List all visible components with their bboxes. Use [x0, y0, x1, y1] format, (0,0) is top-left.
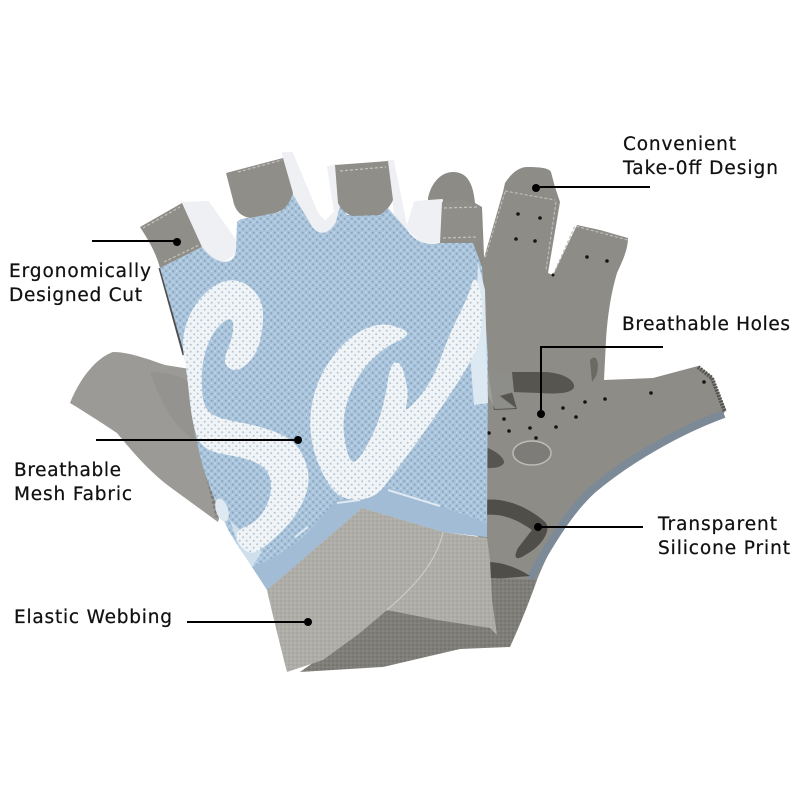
- fingertip stitching: [143, 160, 478, 262]
- callout: convenient take-off design: Take-0ff Design: [622, 158, 778, 179]
- holes: [487, 212, 706, 440]
- blue mesh body: [160, 193, 488, 590]
- script letter S: [184, 281, 308, 552]
- thumb seam: [203, 457, 217, 517]
- thumb tip edge: [698, 367, 725, 412]
- wrist cuff back layer: [300, 578, 537, 672]
- trim highlight: [295, 490, 440, 537]
- silicone patch by thumb: [590, 358, 598, 382]
- dark index lining: [407, 206, 419, 231]
- thumb shading: [150, 372, 194, 440]
- dark edge: [160, 268, 184, 355]
- silicone bubble: [513, 441, 551, 465]
- callout: convenient take-off design: [532, 134, 778, 192]
- right light panel: [470, 262, 488, 405]
- fingertip panels: [140, 203, 202, 268]
- callout: transparent silicone print: [534, 514, 790, 559]
- lower-left pale band: [230, 520, 262, 567]
- side edge strip: [530, 414, 724, 579]
- callout: elastic webbing: [14, 607, 312, 628]
- silver reflection: [488, 372, 516, 409]
- thumb of back side: [70, 352, 240, 522]
- silicone camo bottom: [488, 562, 530, 579]
- callout: convenient take-off design: Convenient: [623, 134, 736, 155]
- callout: breathable holes: Breathable Holes: [622, 314, 790, 335]
- callout: breathable holes: [537, 314, 790, 418]
- back-side glove: [140, 153, 488, 590]
- script letter a with swoosh: [311, 281, 481, 499]
- elastic webbing cuff: [267, 508, 497, 672]
- callout: transparent silicone print: Transparent: [657, 514, 777, 535]
- white finger linings: [182, 153, 442, 262]
- small pale spot: [213, 497, 231, 523]
- callout: breathable mesh fabric: Mesh Fabric: [14, 484, 132, 505]
- callout: breathable mesh fabric: Breathable: [14, 460, 121, 481]
- finger stitching: [485, 191, 628, 275]
- silicone print top: [488, 372, 574, 410]
- silicone camo lower: [484, 500, 547, 558]
- callout: ergonomically designed cut: Designed Cut: [9, 285, 142, 306]
- palm body: [470, 167, 726, 600]
- callout: ergonomically designed cut: Ergonomically: [9, 261, 151, 282]
- dark pinky lining: [204, 202, 233, 240]
- silicone blob left: [484, 447, 504, 468]
- callout: elastic webbing: Elastic Webbing: [14, 607, 172, 628]
- callout: breathable mesh fabric: [14, 436, 302, 505]
- glossy trim above cuff: [252, 487, 487, 590]
- palm-side glove: [428, 167, 726, 600]
- left finger behind: [428, 172, 485, 280]
- callout: ergonomically designed cut: [9, 238, 181, 306]
- cuff fold line: [387, 532, 443, 610]
- cuff main: [267, 508, 497, 672]
- callout: transparent silicone print: Silicone Print: [658, 538, 790, 559]
